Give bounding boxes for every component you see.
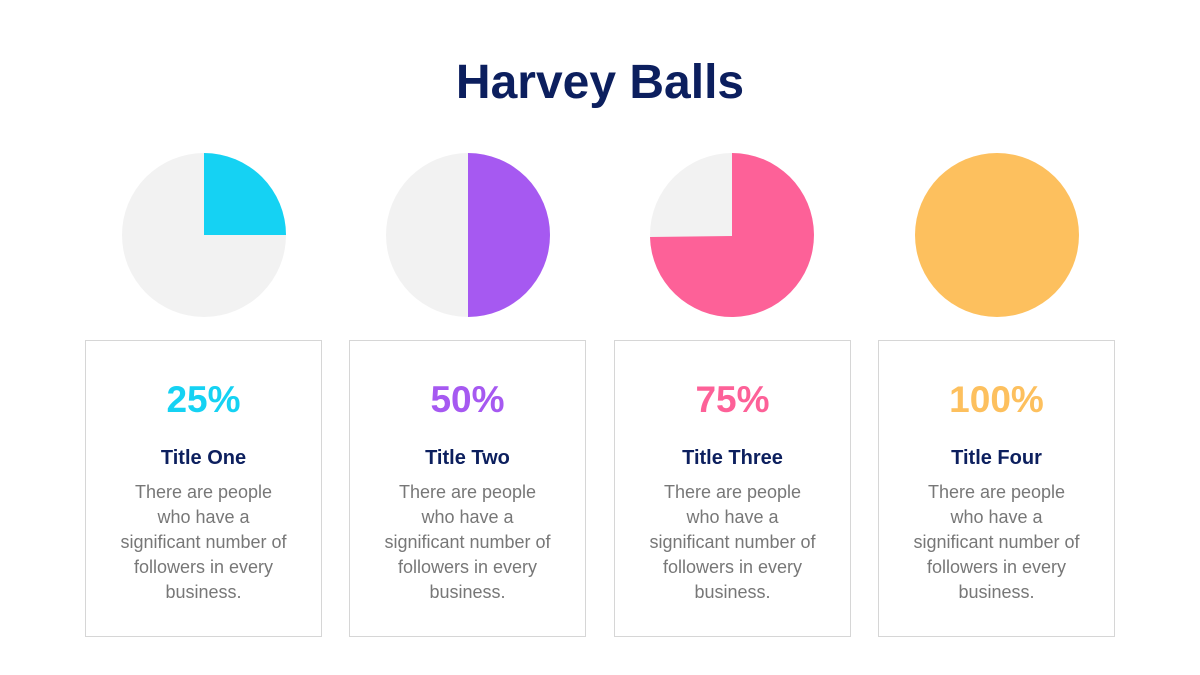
title four: Title Four xyxy=(951,447,1042,469)
body three: There are people xyxy=(664,482,801,502)
body four: business. xyxy=(958,582,1035,602)
body two: business. xyxy=(429,582,506,602)
title one: Title One xyxy=(161,447,246,469)
card two xyxy=(349,340,586,637)
body four: who have a xyxy=(950,507,1043,527)
body two: followers in every xyxy=(398,557,537,577)
body four xyxy=(913,482,1080,602)
body two: significant number of xyxy=(384,532,551,552)
body two: There are people xyxy=(399,482,536,502)
body three xyxy=(649,482,816,602)
body three: followers in every xyxy=(663,557,802,577)
card four xyxy=(878,340,1115,637)
body one: significant number of xyxy=(120,532,287,552)
harvey ball 50% xyxy=(386,153,550,317)
body one: business. xyxy=(165,582,242,602)
body three: business. xyxy=(694,582,771,602)
title two: Title Two xyxy=(425,447,510,469)
body one: who have a xyxy=(157,507,250,527)
body three: who have a xyxy=(686,507,779,527)
harvey ball 75% xyxy=(650,153,814,317)
body three: significant number of xyxy=(649,532,816,552)
percent 100: 100% xyxy=(949,379,1044,420)
card one xyxy=(85,340,322,637)
body two xyxy=(384,482,551,602)
title: Harvey Balls xyxy=(456,56,744,109)
title three: Title Three xyxy=(682,447,783,469)
body one: There are people xyxy=(135,482,272,502)
percent 50: 50% xyxy=(430,379,505,420)
card three xyxy=(614,340,851,637)
body four: significant number of xyxy=(913,532,1080,552)
percent 75: 75% xyxy=(695,379,770,420)
body four: followers in every xyxy=(927,557,1066,577)
harvey ball 25% xyxy=(122,153,286,317)
body one: followers in every xyxy=(134,557,273,577)
harvey ball 100% xyxy=(915,153,1079,317)
percent 25: 25% xyxy=(166,379,241,420)
body two: who have a xyxy=(421,507,514,527)
body one xyxy=(120,482,287,602)
body four: There are people xyxy=(928,482,1065,502)
